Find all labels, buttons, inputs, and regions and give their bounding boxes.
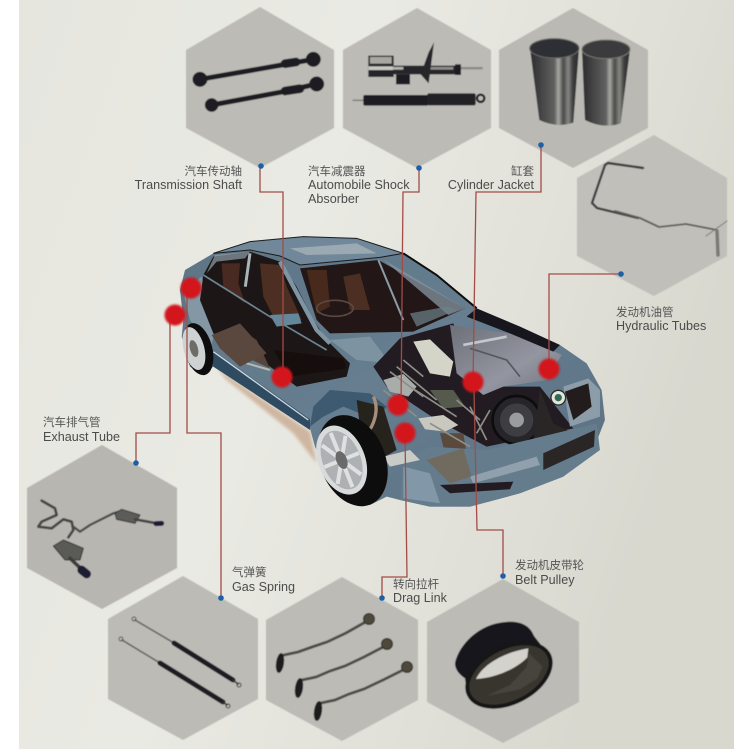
leader line: exhaust tube: [136, 315, 170, 463]
label: cylinder jacket: Cylinder Jacket: [448, 178, 534, 192]
icon: exhaust system: [38, 501, 162, 574]
leader line: drag link: [382, 433, 407, 598]
icon: belt pulley: [455, 622, 561, 720]
label: hydraulic tubes: Hydraulic Tubes: [616, 319, 706, 333]
label: belt pulley: [515, 558, 584, 587]
label: cylinder jacket: 缸套: [511, 164, 534, 178]
label: automobile shock absorber: 汽车减震器: [308, 164, 366, 178]
icon: drag links: [275, 614, 412, 721]
rear wheel: [177, 320, 219, 379]
panel: belt pulley hexagon: [427, 579, 579, 743]
label: exhaust tube: 汽车排气管: [43, 415, 100, 429]
front cabin and windscreen: [300, 260, 465, 333]
leader line: belt pulley: [474, 390, 503, 576]
blue connector dots: [133, 142, 624, 601]
side sill: [210, 348, 310, 430]
rear cabin interior: [200, 252, 350, 387]
label: gas spring: Gas Spring: [232, 580, 295, 594]
leader line: transmission shaft: [260, 166, 283, 378]
label: hydraulic tubes: [616, 305, 706, 333]
label: automobile shock absorber: Automobile Shock: [308, 178, 410, 192]
front bumper: [400, 423, 600, 507]
label: drag link: [393, 577, 448, 605]
panel: gas spring hexagon: [108, 576, 258, 740]
leader line: hydraulic tubes: [549, 274, 620, 368]
radiator fan: [493, 396, 541, 444]
engine details: [383, 360, 490, 447]
car illustration: [177, 237, 605, 517]
leader line: gas spring: [187, 288, 221, 598]
label: drag link: Drag Link: [393, 591, 448, 605]
ground shadow: [217, 368, 317, 463]
label: belt pulley: 发动机皮带轮: [515, 558, 584, 572]
red marker dots: [164, 278, 560, 444]
car body: [180, 237, 605, 507]
panel: hydraulic tubes hexagon: [577, 135, 727, 296]
panel: exhaust tube hexagon: [27, 445, 177, 609]
panel: drag link hexagon: [266, 577, 418, 741]
front wheel: [304, 405, 401, 517]
icon: transmission shafts: [193, 52, 324, 112]
icon: cylinder jackets: [530, 39, 630, 126]
label: automobile shock absorber: Absorber: [308, 192, 359, 206]
suspension and wheel well: [357, 400, 397, 463]
panel: shock absorber hexagon: [343, 8, 491, 168]
panel: cylinder jacket hexagon: [499, 8, 648, 168]
label: drag link: 转向拉杆: [393, 577, 439, 591]
panel: transmission shaft hexagon: [186, 7, 334, 168]
label: exhaust tube: [43, 415, 120, 444]
label: transmission shaft: Transmission Shaft: [135, 178, 242, 192]
label: gas spring: [232, 565, 295, 594]
label: cylinder jacket: [448, 164, 534, 192]
icon: shock absorbers: [353, 42, 484, 106]
leader line: shock absorber: [401, 168, 419, 405]
roof: [213, 237, 403, 265]
icon: hydraulic tube: [592, 163, 727, 255]
label: exhaust tube: Exhaust Tube: [43, 430, 120, 444]
leader line: cylinder jacket: [473, 145, 541, 382]
icon: gas springs: [119, 617, 241, 708]
label: transmission shaft: [135, 164, 242, 192]
label: transmission shaft: 汽车传动轴: [184, 164, 242, 178]
front headlight and grille: [563, 378, 600, 427]
hood cover: [450, 325, 562, 395]
rear quarter panel: [183, 277, 215, 348]
engine bay: [373, 323, 573, 447]
label: belt pulley: Belt Pulley: [515, 573, 575, 587]
label: automobile shock absorber: [308, 164, 410, 206]
label: hydraulic tubes: 发动机油管: [616, 305, 674, 319]
label: gas spring: 气弹簧: [232, 565, 266, 579]
